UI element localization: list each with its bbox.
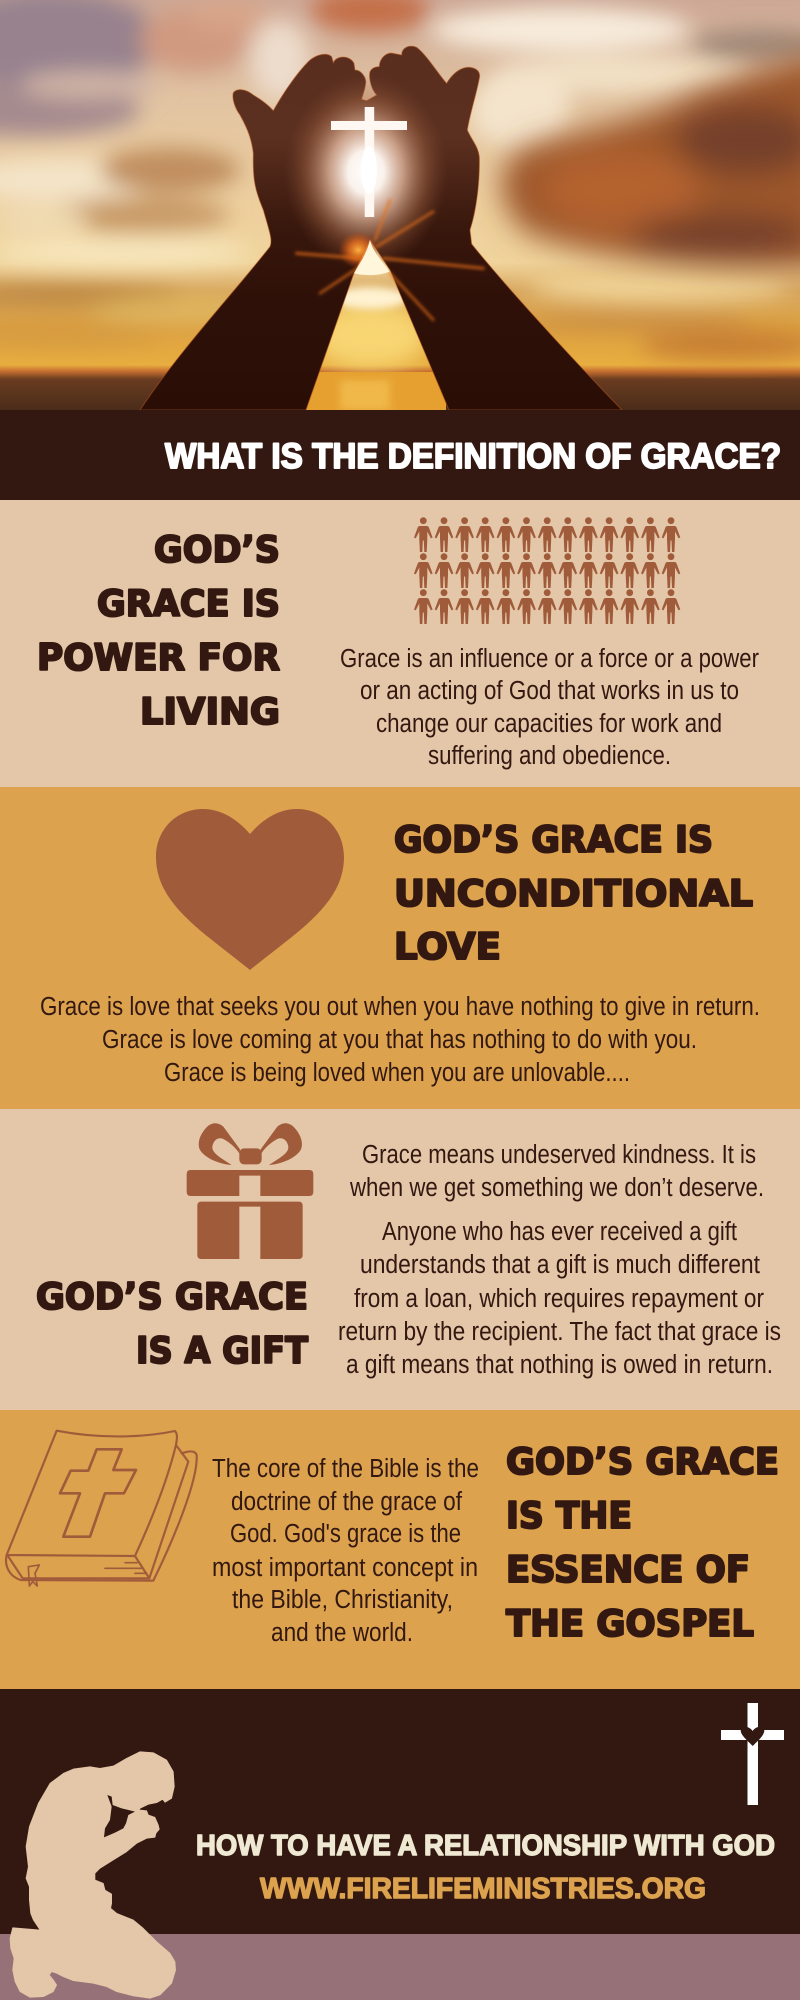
icon: gift box	[187, 1123, 313, 1259]
icon: bible	[6, 1431, 197, 1586]
text: gift description	[338, 1218, 781, 1379]
heading: grace is a gift: GOD’S GRACE	[36, 1275, 308, 1318]
text: bible description: the Bible, Christianity,	[232, 1586, 453, 1614]
text: power description	[340, 645, 759, 770]
heading: essence of the gospel	[506, 1440, 779, 1645]
panel: unconditional love	[0, 787, 800, 1109]
heading: power for living: GRACE IS	[97, 582, 280, 625]
text: bible description: most important concept in	[212, 1554, 478, 1582]
footer text: relationship with god: HOW TO HAVE A RELATIONSHIP WITH GOD	[196, 1830, 775, 1862]
icon: white cross with heart	[721, 1703, 784, 1805]
heading: unconditional love: UNCONDITIONAL	[394, 872, 753, 915]
text: bible description: and the world.	[271, 1619, 413, 1647]
heading: power for living: GOD’S	[154, 528, 280, 571]
heading: essence of the gospel: THE GOSPEL	[506, 1602, 754, 1645]
title: WHAT IS THE DEFINITION OF GRACE?	[165, 437, 781, 476]
heading: power for living: LIVING	[140, 690, 280, 733]
heading: essence of the gospel: ESSENCE OF	[506, 1548, 750, 1591]
icon: praying figure	[10, 1752, 176, 1998]
text: bible description: The core of the Bible is the	[212, 1455, 479, 1483]
text: gift description: Anyone who has ever received a gift	[382, 1218, 737, 1246]
text: gift description: understands that a gift is much different	[360, 1251, 760, 1279]
hands silhouette	[140, 46, 622, 410]
text: power description: or an acting of God that works in us to	[360, 677, 739, 705]
heading: grace is a gift: IS A GIFT	[136, 1329, 308, 1372]
heading: unconditional love: GOD’S GRACE IS	[394, 818, 713, 861]
text: love description	[40, 993, 760, 1087]
footer text: website: WWW.FIRELIFEMINISTRIES.ORG	[260, 1873, 706, 1905]
footer panel	[0, 1689, 800, 2000]
text: love description: Grace is love coming at you that has nothing to do with you.	[102, 1026, 697, 1054]
text: bible description: doctrine of the grace of	[231, 1488, 463, 1516]
sun flare and rays	[297, 200, 483, 320]
text: power description: suffering and obedience.	[428, 742, 671, 770]
cross of light	[331, 107, 407, 217]
text: bible description	[212, 1455, 479, 1647]
panel: power for living	[0, 500, 800, 787]
heading: unconditional love	[394, 818, 753, 968]
light glow between the palms	[291, 78, 441, 264]
heading: power for living: POWER FOR	[37, 636, 280, 679]
hero photo: hands raised around a glowing cross at sunset	[0, 0, 800, 410]
text: kindness	[349, 1141, 764, 1202]
heading: unconditional love: LOVE	[394, 925, 501, 968]
heading: grace is a gift	[36, 1275, 308, 1372]
heading: power for living	[37, 528, 280, 733]
text: power description: change our capacities for work and	[376, 710, 722, 738]
icon: heart	[156, 809, 344, 970]
text: love description: Grace is being loved when you are unlovable....	[164, 1059, 630, 1087]
panel: gift	[0, 1109, 800, 1410]
text: bible description: God. God's grace is the	[230, 1520, 461, 1548]
dark sunset cloud on the right	[502, 50, 800, 269]
icon: rows of people	[414, 517, 680, 624]
panel: essence of the gospel	[0, 1410, 800, 1689]
sea reflection	[306, 372, 446, 410]
heading: essence of the gospel: GOD’S GRACE	[506, 1440, 779, 1483]
heading: essence of the gospel: IS THE	[506, 1494, 632, 1537]
title banner	[0, 410, 800, 500]
